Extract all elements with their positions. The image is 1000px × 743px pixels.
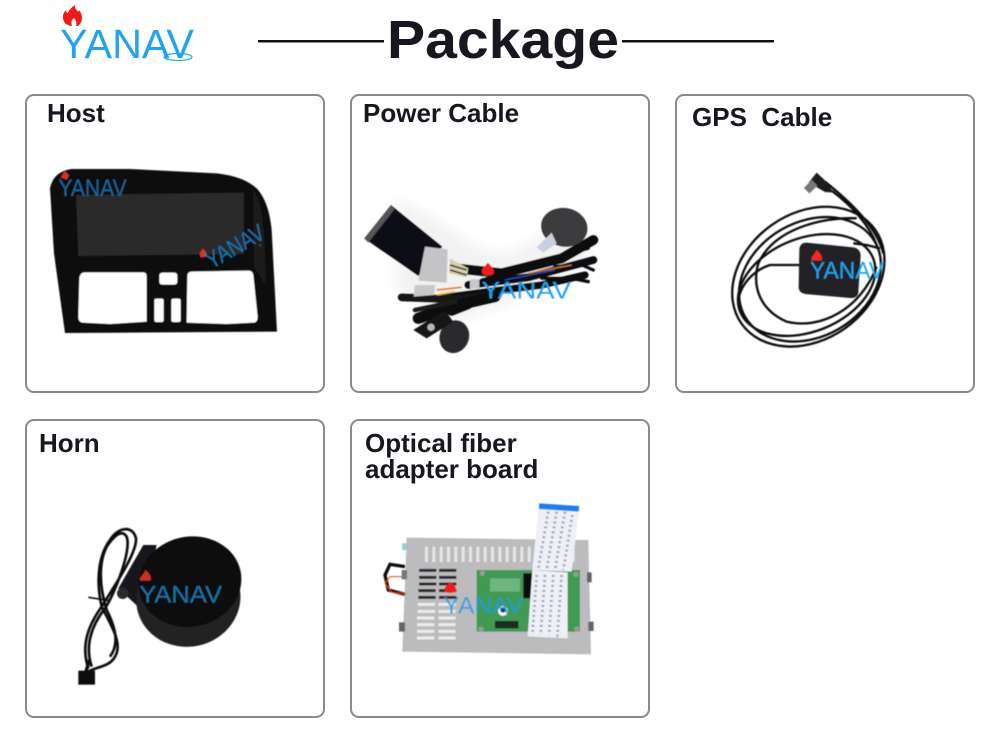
heading: Host: Host [47,98,105,128]
panel: Power Cable [351,95,649,392]
heading: Power Cable: Power Cable [363,98,519,128]
image: wiring harness: YANAV [482,277,571,304]
panel: Host [26,95,324,392]
watermark [140,570,151,581]
panel: GPS Cable [676,95,974,392]
image: metal adapter board with ribbon cable: YANAV [443,592,523,619]
image: head unit with black bezel: YANAV [201,219,269,275]
watermark [482,263,494,276]
heading: Optical fiber adapter board: Optical fiber [365,428,517,458]
image: GPS antenna puck and coiled cable [705,173,912,375]
title: Package with side rules: Package [387,10,619,70]
image: head unit with black bezel: YANAV [58,175,127,202]
image: round black horn with cable: YANAV [139,582,222,609]
panel: Optical fiber adapter board [351,420,649,717]
panel: Horn [26,420,324,717]
image: wiring harness [364,200,593,357]
watermark [811,250,822,261]
logo: YANAV brand: YANAV [60,21,195,67]
image: round black horn with cable [78,527,250,685]
image: GPS antenna puck and coiled cable: YANAV [810,258,884,285]
heading: Optical fiber adapter board: adapter board [365,454,538,484]
image: head unit with black bezel [50,169,277,333]
heading: Horn: Horn [39,428,100,458]
heading: GPS Cable: GPS Cable [692,102,832,132]
watermark [445,582,456,593]
image: metal adapter board with ribbon cable [385,503,594,654]
watermark [61,171,69,180]
